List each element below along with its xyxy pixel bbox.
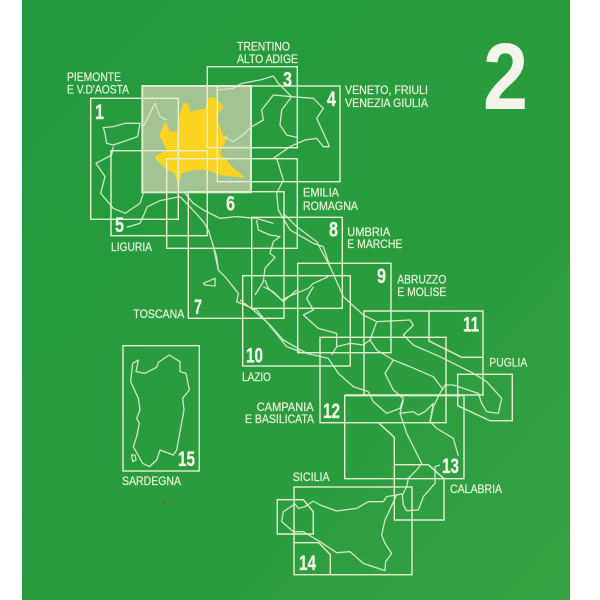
sheet numbers: 9 bbox=[377, 265, 386, 288]
region labels: CALABRIA bbox=[450, 482, 502, 496]
sheet numbers: 14 bbox=[299, 552, 316, 575]
region labels: TRENTINO bbox=[237, 40, 290, 54]
region: Lombardia in yellow bbox=[155, 97, 245, 188]
sheet numbers: 11 bbox=[463, 314, 479, 337]
region labels: LAZIO bbox=[242, 370, 271, 384]
sheet numbers: 5 bbox=[115, 214, 124, 237]
region labels: ALTO ADIGE bbox=[237, 52, 298, 66]
sheet numbers: 8 bbox=[329, 219, 338, 242]
sheet numbers: 4 bbox=[327, 88, 336, 111]
region labels: PUGLIA bbox=[489, 356, 527, 370]
sheet numbers: 6 bbox=[226, 193, 235, 216]
sheet numbers bbox=[95, 69, 479, 575]
region labels: UMBRIA bbox=[347, 225, 390, 239]
sheet numbers: 10 bbox=[246, 345, 263, 368]
sheet numbers: 13 bbox=[442, 455, 459, 478]
highlighted map sheet: Lombardia bbox=[142, 86, 251, 192]
region labels: SICILIA bbox=[293, 470, 330, 484]
region labels: CAMPANIA bbox=[257, 400, 314, 414]
print speck bbox=[163, 501, 165, 503]
region labels: PIEMONTE bbox=[67, 70, 121, 84]
region labels bbox=[67, 40, 527, 496]
region labels: E MARCHE bbox=[347, 237, 402, 251]
region labels: E MOLISE bbox=[397, 285, 446, 299]
sheet numbers: 3 bbox=[283, 69, 292, 92]
region labels: LIGURIA bbox=[111, 240, 152, 254]
sheet numbers: 7 bbox=[194, 296, 202, 319]
region labels: E V.D'AOSTA bbox=[67, 82, 129, 96]
region labels: ABRUZZO bbox=[397, 273, 446, 287]
sheet numbers: 12 bbox=[323, 400, 340, 423]
map: outline of Sicilia bbox=[282, 494, 402, 571]
region labels: VENETO, FRIULI bbox=[345, 83, 428, 97]
region labels: TOSCANA bbox=[133, 307, 184, 321]
region labels: SARDEGNA bbox=[122, 474, 181, 488]
region labels: ROMAGNA bbox=[303, 199, 358, 213]
map: outline of mainland Italy bbox=[96, 76, 502, 511]
sheet numbers: 1 bbox=[95, 101, 104, 124]
sheet numbers: 15 bbox=[178, 448, 195, 471]
map: outline of Sardegna bbox=[131, 355, 189, 467]
region labels: EMILIA bbox=[303, 186, 339, 200]
region labels: VENEZIA GIULIA bbox=[345, 96, 428, 110]
heading: volume number 2: 2 bbox=[483, 24, 528, 130]
map sheet frames bbox=[91, 67, 512, 575]
region labels: E BASILICATA bbox=[245, 412, 314, 426]
